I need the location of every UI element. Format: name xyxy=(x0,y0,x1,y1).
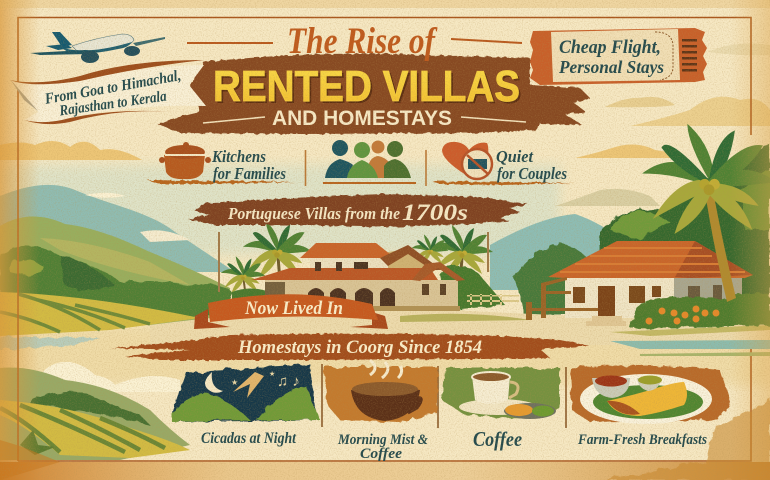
panel: cicadas at night xyxy=(172,364,320,447)
route ribbon: Rajasthan to Kerala xyxy=(58,89,168,120)
icon: cup with saucer xyxy=(459,399,537,415)
banner: Portuguese villas xyxy=(188,194,528,227)
kitchens label: Kitchens xyxy=(211,147,266,166)
icon: airplane xyxy=(30,32,165,63)
feature: quiet for couples xyxy=(432,142,575,185)
ribbon text: Now Lived In xyxy=(244,299,343,319)
panel label: Farm-Fresh Breakfasts xyxy=(577,432,707,448)
clouds xyxy=(0,44,770,392)
banner: Portuguese villas: 1700s xyxy=(402,200,468,225)
panel label: Morning Mist & xyxy=(337,432,428,448)
arches xyxy=(308,288,395,306)
ground xyxy=(150,309,770,356)
green hill xyxy=(0,216,230,325)
fence xyxy=(526,277,598,320)
title rules xyxy=(187,39,522,43)
ticket text: Cheap Flight, xyxy=(559,37,661,58)
walls xyxy=(265,280,458,306)
fence xyxy=(467,294,519,305)
feature: quiet for couples: for Couples xyxy=(497,164,567,183)
door and windows xyxy=(598,286,615,317)
quiet label: Quiet xyxy=(496,147,534,166)
feature: kitchens for families: for Families xyxy=(213,164,286,183)
roofs xyxy=(300,243,395,258)
banner text: Homestays in Coorg Since 1854 xyxy=(237,337,482,358)
panel: cicadas at night: ★ xyxy=(269,370,275,378)
Portuguese villa xyxy=(221,221,519,311)
panel label: Coffee xyxy=(473,427,522,451)
panel: farm-fresh breakfasts xyxy=(570,365,730,448)
panel: morning mist and coffee: Coffee xyxy=(360,446,402,462)
terraced field xyxy=(0,292,200,336)
title line two: RENTED VILLAS xyxy=(215,64,522,113)
mist xyxy=(0,336,100,350)
ribbon: now lived in xyxy=(194,294,388,329)
ticket: cheap flight xyxy=(530,28,707,85)
banner text: Portuguese Villas from the xyxy=(227,204,400,223)
farmhouse with tiled roof xyxy=(526,241,770,328)
sky haze xyxy=(0,165,770,385)
trees behind xyxy=(440,265,505,310)
icon: people group xyxy=(323,140,416,184)
route text: From Goa to Himachal, xyxy=(43,67,182,108)
left landscape xyxy=(0,185,235,350)
lower-left landscape xyxy=(0,368,190,460)
icon: cooking pot xyxy=(159,142,211,179)
steps xyxy=(586,316,626,326)
marigold bush xyxy=(630,293,770,328)
icon: heart with crossed-out screen xyxy=(442,142,492,179)
icon: crescent moon xyxy=(205,372,223,393)
panel: cicadas at night: ★ xyxy=(231,378,238,387)
title line one: The Rise of xyxy=(287,21,438,62)
banner: homestays in Coorg xyxy=(110,334,590,360)
panel: coffee xyxy=(442,368,560,451)
route ribbon xyxy=(10,60,206,124)
main title banner: RENTED VILLAS xyxy=(213,62,520,111)
walls xyxy=(565,276,676,318)
large palm tree xyxy=(642,124,770,302)
ticket: cheap flight: Personal Stays xyxy=(558,57,664,77)
right landscape xyxy=(490,145,770,320)
icon: cicada xyxy=(233,372,264,398)
panel label: Cicadas at Night xyxy=(201,430,297,447)
icon: coffee cup xyxy=(351,360,421,421)
villa palms xyxy=(242,250,464,300)
icon: dosa plate xyxy=(580,374,712,424)
panel: morning mist and coffee xyxy=(325,360,438,462)
bushes xyxy=(0,246,232,318)
windows xyxy=(315,262,368,271)
roof xyxy=(548,241,753,278)
main title banner xyxy=(157,21,590,134)
icon: music notes: ♫ ♪ xyxy=(277,373,300,390)
blue mountains xyxy=(0,185,235,272)
bottom-right foliage xyxy=(600,398,770,480)
title line three: AND HOMESTAYS xyxy=(272,107,452,130)
feature: kitchens for families xyxy=(147,142,296,184)
brush stroke xyxy=(157,54,590,134)
